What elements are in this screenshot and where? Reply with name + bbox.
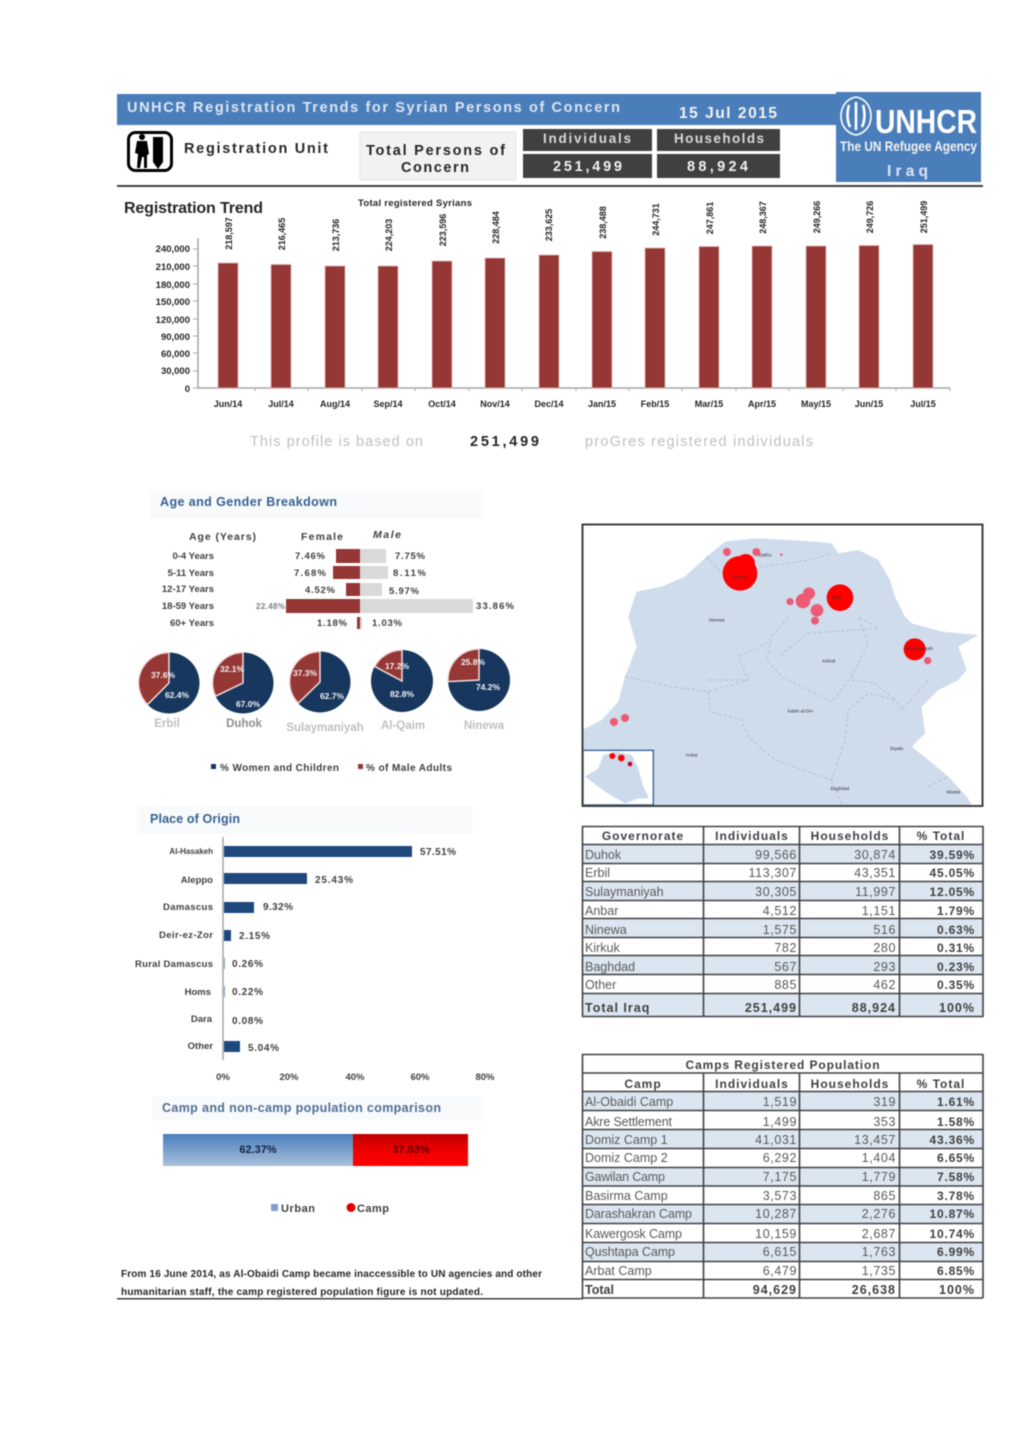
pie: Ninewa: 74.2% [476,682,500,692]
row: Kirkuk: Kirkuk [585,941,620,955]
origin category labels [135,847,213,1052]
pie: Erbil: Erbil [154,718,180,730]
pie: Al-Qaim: 17.2% [385,661,409,671]
percent labels: 1.03% [372,618,403,629]
x axis labels: Jul/15 [910,399,936,409]
y axis labels [156,244,190,395]
place labels: Sulaymaniyah [904,646,933,651]
row: Baghdad [585,960,975,974]
y axis labels: 150,000 [156,297,190,308]
percent labels: 5.97% [389,586,420,597]
origin axis labels: 40% [345,1072,365,1083]
row: Gawilan Camp: 7.58% [937,1170,975,1184]
row: Total Iraq: 100% [939,1001,975,1015]
percent labels: 7.75% [395,551,426,562]
row: Domiz Camp 2 [585,1151,975,1165]
age labels [162,551,214,629]
row: Domiz Camp 2: 6,292 [763,1151,797,1165]
pie: Sulaymaniyah: 37.3% [293,668,317,678]
circles: smaller sites [610,548,931,726]
age labels: 60+ Years [170,618,214,629]
origin value labels: 0.08% [232,1016,263,1027]
camp legend: Camp [357,1203,389,1215]
bar value labels: 218,597 [224,217,234,250]
place labels: Zakho [759,553,772,558]
row: Darashakran Camp [585,1207,975,1221]
origin value labels: 9.32% [263,902,293,913]
x axis labels: Mar/15 [695,399,723,409]
logo wordmark: UNHCR [875,103,977,140]
row: Anbar: 1,151 [862,904,896,918]
row: Domiz Camp 1: 13,457 [854,1133,896,1147]
row: Basirma Camp: 865 [873,1189,896,1203]
y axis labels: 60,000 [161,349,190,360]
pie: Duhok: 32.1% [220,664,244,674]
row: Al-Obaidi Camp: Al-Obaidi Camp [585,1095,673,1109]
inset: Iraq overview [583,750,653,805]
origin category labels: Al-Hasakeh [169,847,213,856]
origin value labels: 0.26% [232,959,263,970]
row: Total: Total [585,1283,614,1297]
percent labels: 7.46% [295,551,326,562]
pie: Duhok: Duhok [226,718,262,730]
row: Duhok: 99,566 [755,848,797,862]
logo tagline: The UN Refugee Agency [840,138,977,154]
x axis labels: Jul/14 [268,399,294,409]
percent labels: 4.52% [305,585,336,596]
headline counts: Individuals [543,131,631,146]
row: Arbat Camp: Arbat Camp [585,1264,652,1278]
row: Kirkuk [585,941,975,955]
row: Akre Settlement [585,1115,975,1129]
row: Anbar: 1.79% [937,904,975,918]
profile basis note: proGres registered individuals [585,434,813,450]
origin value labels: 0.22% [232,987,263,998]
row: Erbil: 45.05% [930,866,975,880]
percent labels: 1.18% [317,618,348,629]
bar value labels [224,201,929,251]
row: Qushtapa Camp: 6.99% [937,1245,975,1259]
male bars [360,549,473,629]
percent labels: 8.11% [393,568,427,579]
bar value labels: 223,596 [438,214,448,246]
row: Ninewa: Ninewa [585,923,627,937]
row: Domiz Camp 1: 41,031 [755,1133,797,1147]
origin value labels: 5.04% [248,1043,279,1054]
pie: Sulaymaniyah: Sulaymaniyah [286,722,364,734]
row: Domiz Camp 2: 6.65% [937,1151,975,1165]
footnote: From 16 June 2014, as Al-Obaidi Camp became inaccessible to UN agencies and other [121,1269,542,1280]
chart: camp vs non-camp stacked bar: 62.37% [239,1144,277,1156]
row: Other: 462 [873,978,896,992]
x axis labels [214,399,936,409]
place labels: Salah al-Din [787,708,813,713]
age labels: 18-59 Years [162,601,214,612]
row: Duhok: 30,874 [854,848,896,862]
banner title: UNHCR Registration Trends for Syrian Persons of Concern [127,100,620,116]
row: Other: 0.35% [937,978,975,992]
origin category labels: Deir-ez-Zor [159,930,213,941]
headline counts: 88,924 [687,159,748,175]
camp legend: Urban [281,1203,315,1215]
row: Erbil: Erbil [585,866,610,880]
panel: age and gender heading: Age and Gender Breakdown [160,495,337,509]
pie legend: % of Male Adults [366,763,452,774]
row: Total: 100% [939,1283,975,1297]
footnote: humanitarian staff, the camp registered population figure is not updated. [121,1287,483,1298]
row: Qushtapa Camp [585,1245,975,1259]
x axis labels: May/15 [801,399,831,409]
row: Kirkuk: 782 [774,941,797,955]
row: Kawergosk Camp: 2,687 [862,1227,896,1241]
row: Total: 26,638 [852,1283,896,1297]
row: Erbil [585,866,975,880]
origin axis labels: 80% [475,1072,495,1083]
row: Baghdad: 293 [873,960,896,974]
row: Anbar: 4,512 [763,904,797,918]
bar chart: registration trend [156,201,950,409]
place labels: Anbar [685,753,698,758]
chart: camp vs non-camp stacked bar [163,1134,468,1166]
age labels: 12-17 Years [162,584,214,595]
bar value labels: 228,484 [491,211,501,244]
row: Qushtapa Camp: 1,763 [862,1245,896,1259]
row: Ninewa: 0.63% [937,923,975,937]
row: Duhok: Duhok [585,848,622,862]
chart: age and gender pyramid [162,529,515,629]
header row: % Total [917,829,965,843]
header row: Individuals [715,829,789,843]
country name: Iraq [887,163,928,180]
y axis labels: 30,000 [161,366,190,377]
place labels: Baghdad [831,786,850,791]
x axis labels: Jun/15 [855,399,883,409]
age labels: 5-11 Years [168,568,214,579]
row: Baghdad: 0.23% [937,960,975,974]
pie: Duhok [212,652,274,730]
female bars [286,549,360,629]
row: Kawergosk Camp: Kawergosk Camp [585,1227,682,1241]
row: Baghdad: Baghdad [585,960,635,974]
row: Qushtapa Camp: 6,615 [763,1245,797,1259]
place labels: Wassit [946,789,961,794]
bar value labels: 238,488 [598,206,608,239]
row: Duhok [585,848,975,862]
report date: 15 Jul 2015 [679,105,777,122]
row: Basirma Camp: Basirma Camp [585,1189,668,1203]
row: Arbat Camp [585,1264,975,1278]
origin category labels: Dara [191,1014,213,1025]
header row [602,829,965,843]
row: Arbat Camp: 1,735 [862,1264,896,1278]
y axis labels: 0 [185,384,190,395]
profile basis note: 251,499 [470,434,539,450]
row: Basirma Camp [585,1189,975,1203]
row: Arbat Camp: 6.85% [937,1264,975,1278]
pie: Ninewa: Ninewa [464,720,505,732]
origin axis labels: 20% [279,1072,299,1083]
chart: age and gender pyramid: Male [373,529,401,541]
origin category labels: Damascus [163,902,213,913]
row: Darashakran Camp: Darashakran Camp [585,1207,692,1221]
row: Domiz Camp 1 [585,1133,975,1147]
origin axis labels: 60% [410,1072,430,1083]
pie: Al-Qaim [371,650,433,732]
row: Qushtapa Camp: Qushtapa Camp [585,1245,675,1259]
row: Sulaymaniyah: Sulaymaniyah [585,885,664,899]
row: Kawergosk Camp: 10,159 [755,1227,797,1241]
panel: camp comparison heading: Camp and non-camp population comparison [162,1101,441,1115]
panel: camp comparison heading [152,1096,483,1120]
origin axis labels: 0% [216,1072,230,1083]
percent labels: 22.48% [256,602,285,611]
place labels: Diyala [890,746,904,751]
panel: place of origin heading [137,806,473,834]
heading: registration trend: Registration Trend [124,200,263,217]
row: Erbil: 113,307 [749,866,797,880]
row: Total [585,1283,975,1297]
row: Other [585,978,975,992]
row: Ninewa: 1,575 [763,923,797,937]
age labels: 0-4 Years [172,551,214,562]
pie: Erbil: 37.6% [151,670,175,680]
icon: registration unit [128,132,172,170]
x axis labels: Jan/15 [588,399,616,409]
pie: Erbil [138,652,200,730]
row: Sulaymaniyah: 30,305 [755,885,797,899]
x axis labels: Aug/14 [320,399,350,409]
bar value labels: 224,203 [384,219,394,251]
pie: Sulaymaniyah: 62.7% [320,691,344,701]
origin value labels [232,847,456,1054]
row: Gawilan Camp: 7,175 [763,1170,797,1184]
place labels: Duhok [733,574,747,579]
row: Kawergosk Camp: 10.74% [930,1227,975,1241]
row: Ninewa: 516 [873,923,896,937]
map of Iraq with registered population circles [582,524,983,806]
percent labels [256,551,515,629]
y axis labels: 90,000 [161,332,190,343]
row: Darashakran Camp: 10.87% [930,1207,975,1221]
y axis labels: 210,000 [156,262,190,273]
row: Arbat Camp: 6,479 [763,1264,797,1278]
row: Total: 94,629 [753,1283,797,1297]
row: Ninewa [585,923,975,937]
bar value labels: 213,736 [331,219,341,251]
row: Domiz Camp 2: Domiz Camp 2 [585,1151,668,1165]
row: Al-Obaidi Camp [585,1095,975,1109]
bar value labels: 249,266 [812,201,822,233]
row: Domiz Camp 1: 43.36% [930,1133,975,1147]
row: Other: Other [585,978,616,992]
row: Total Iraq: 251,499 [745,1001,797,1015]
row: Basirma Camp: 3.78% [937,1189,975,1203]
chart: age and gender pyramid: Age (Years) [189,531,256,543]
headline counts [523,129,780,178]
bar chart: place of origin [135,837,495,1083]
row: Al-Obaidi Camp: 1,519 [763,1095,797,1109]
header row: % Total [917,1077,965,1091]
footnote [121,1269,542,1298]
pie: Ninewa: 25.8% [461,657,485,667]
place labels: Erbil [832,595,841,600]
bar value labels: 247,861 [705,202,715,234]
UNHCR logo block [836,92,981,182]
row: Domiz Camp 2: 1,404 [862,1151,896,1165]
pie legend [211,763,452,774]
headline counts: Households [674,131,764,146]
place labels: Kirkuk [823,658,836,663]
origin category labels: Rural Damascus [135,959,213,970]
icon: UNHCR emblem [841,97,871,135]
row: Kirkuk: 0.31% [937,941,975,955]
row: Anbar [585,904,975,918]
bar value labels: 233,625 [544,209,554,241]
y axis labels: 120,000 [156,315,190,326]
row: Gawilan Camp [585,1170,975,1184]
row: Al-Obaidi Camp: 319 [873,1095,896,1109]
row: Akre Settlement: Akre Settlement [585,1115,673,1129]
origin bars [224,846,412,1052]
total persons of concern box: Total Persons of [366,143,505,159]
bar value labels: 248,367 [758,201,768,234]
header row [624,1077,965,1091]
origin value labels: 25.43% [315,875,353,886]
pie legend: % Women and Children [220,763,339,774]
pie: Duhok: 67.0% [236,699,260,709]
origin value labels: 57.51% [420,847,456,858]
profile basis note: This profile is based on [250,434,423,450]
table title: Camps Registered Population [686,1058,880,1072]
pie: Al-Qaim: Al-Qaim [381,720,425,732]
x axis labels: Dec/14 [534,399,564,409]
row: Akre Settlement: 353 [873,1115,896,1129]
header row: Households [811,1077,889,1091]
row: Kirkuk: 280 [873,941,896,955]
percent labels: 7.68% [294,568,327,579]
bar value labels: 249,726 [865,201,875,233]
camp legend [271,1203,389,1215]
chart title: Total registered Syrians [358,198,472,209]
place labels: Ninewa [709,617,725,622]
row: Gawilan Camp: Gawilan Camp [585,1170,665,1184]
row: Basirma Camp: 3,573 [763,1189,797,1203]
row: Erbil: 43,351 [854,866,896,880]
y axis labels: 180,000 [156,280,190,291]
total persons of concern box: Concern [401,160,469,176]
percent labels: 33.86% [476,601,515,612]
pie: Ninewa [448,649,510,732]
x axis labels: Feb/15 [641,399,669,409]
row: Sulaymaniyah: 11,997 [855,885,896,899]
table: governorate [582,826,983,1017]
origin category labels: Other [188,1041,213,1052]
row: Baghdad: 567 [774,960,797,974]
bar value labels: 251,499 [919,201,929,233]
bars [218,244,933,388]
governorate borders [625,553,948,805]
pie: Al-Qaim: 82.8% [390,689,414,699]
row: Sulaymaniyah [585,885,975,899]
row: Akre Settlement: 1,499 [763,1115,797,1129]
profile basis note [250,434,813,450]
circles: largest concentrations [723,554,926,660]
place labels [685,553,961,794]
y axis labels: 240,000 [156,244,190,255]
panel: place of origin heading: Place of Origin [150,812,240,826]
origin category labels: Homs [185,987,211,998]
header row: Camp [624,1077,662,1091]
row: Kawergosk Camp [585,1227,975,1241]
origin axis labels [216,1072,495,1083]
row: Duhok: 39.59% [930,848,975,862]
row: Total Iraq: Total Iraq [585,1001,650,1015]
header row: Governorate [602,829,684,843]
bar value labels: 216,465 [277,218,287,250]
row: Total Iraq: 88,924 [852,1001,896,1015]
x axis labels: Jun/14 [214,399,242,409]
row: Total Iraq [585,1001,975,1015]
row: Gawilan Camp: 1,779 [862,1170,896,1184]
x axis labels: Oct/14 [428,399,456,409]
pie: Erbil: 62.4% [165,690,189,700]
unit label: Registration Unit [184,141,328,157]
chart: camp vs non-camp stacked bar: 37.63% [392,1144,430,1156]
header row: Households [811,829,889,843]
pie: Sulaymaniyah [286,652,364,734]
row: Akre Settlement: 1.58% [937,1115,975,1129]
row: Other: 885 [774,978,797,992]
x axis labels: Sep/14 [373,399,403,409]
panel: age and gender heading [150,491,483,518]
row: Darashakran Camp: 10,287 [755,1207,797,1221]
origin category labels: Aleppo [181,875,213,886]
origin value labels: 2.15% [239,931,270,942]
land area [583,538,978,805]
header banner [117,94,837,125]
header row: Individuals [715,1077,789,1091]
x axis labels: Nov/14 [480,399,510,409]
chart: age and gender pyramid: Female [301,531,343,543]
table: camps registered population [582,1054,983,1298]
total persons of concern box [360,132,516,180]
row: Domiz Camp 1: Domiz Camp 1 [585,1133,668,1147]
row: Sulaymaniyah: 12.05% [930,885,975,899]
row: Anbar: Anbar [585,904,618,918]
headline counts: 251,499 [553,159,622,175]
x axis labels: Apr/15 [748,399,776,409]
bar value labels: 244,731 [651,203,661,236]
row: Darashakran Camp: 2,276 [862,1207,896,1221]
row: Al-Obaidi Camp: 1.61% [937,1095,975,1109]
